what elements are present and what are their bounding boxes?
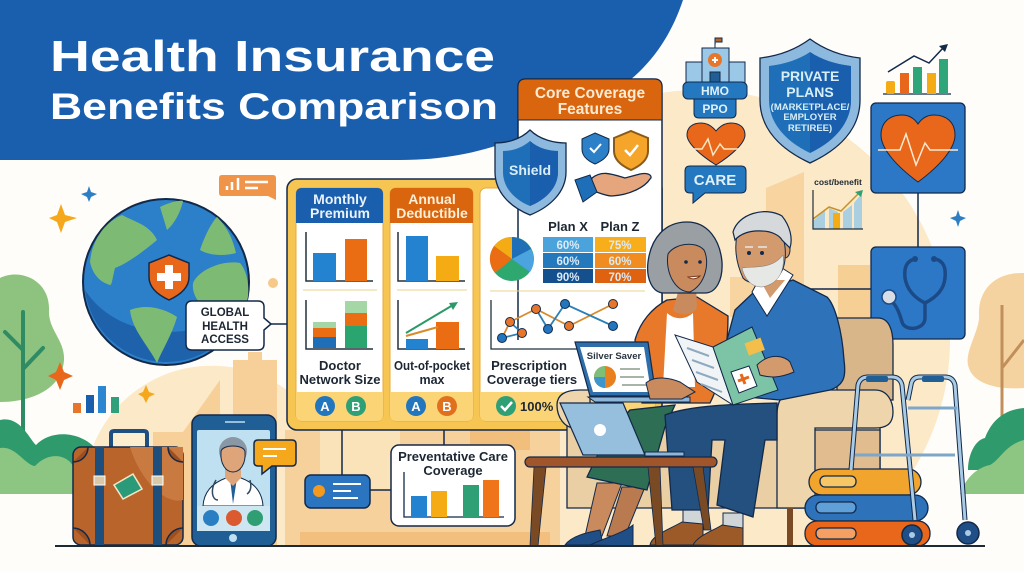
man trousers <box>665 403 777 517</box>
panel: preventative care coverage: Preventative Care <box>398 449 508 464</box>
column: prescription coverage: 100% <box>520 399 554 414</box>
shield: private plans: (MARKETPLACE/ <box>771 102 850 113</box>
callout: global health access: ACCESS <box>201 334 249 346</box>
coverage table: plan x and plan z: 60% <box>556 256 580 268</box>
column: monthly premium: A <box>320 399 330 414</box>
woman hand <box>646 378 695 399</box>
man ear <box>780 242 790 258</box>
laptop: silver front <box>560 403 684 456</box>
background: peach city blob <box>84 90 950 547</box>
man head <box>736 230 785 283</box>
armchair sofa <box>557 318 893 546</box>
column: annual deductible: Out-of-pocket <box>394 359 471 373</box>
panel: core coverage features: Features <box>558 101 622 118</box>
title: Benefits Comparison <box>50 86 498 127</box>
coverage table: plan x and plan z: 75% <box>608 240 632 252</box>
woman hair <box>648 222 722 293</box>
woman neck <box>673 285 697 314</box>
column: prescription coverage <box>480 188 655 421</box>
label: hmo ppo <box>683 82 747 118</box>
suitcase <box>73 431 183 545</box>
label: prescription coverage tiers: Prescription <box>491 358 567 373</box>
coverage table: plan x and plan z: 60% <box>556 240 580 252</box>
man collar <box>752 268 793 316</box>
icon: shield: Shield <box>509 162 551 178</box>
callout: global health access <box>186 301 287 350</box>
coffee table <box>525 457 717 546</box>
sparkle stars <box>48 186 966 403</box>
coverage table: plan x and plan z: Plan X <box>548 219 588 234</box>
column: annual deductible: Annual <box>408 191 456 207</box>
ground line <box>55 545 985 547</box>
panel: stethoscope icon box <box>871 247 965 339</box>
blue info card <box>305 475 370 508</box>
booklet <box>675 327 778 405</box>
left bushes <box>0 419 97 494</box>
panel: preventative care coverage <box>391 445 515 526</box>
coverage table: plan x and plan z: 90% <box>556 272 580 284</box>
icon: orange chart speech bubble <box>219 175 276 200</box>
column: monthly premium <box>296 188 383 421</box>
speech bubble: care: CARE <box>694 172 736 189</box>
panel: comparison board <box>287 179 662 430</box>
icon: yellow chat bubble <box>254 440 296 474</box>
mini pie chart <box>490 237 534 281</box>
panel: core coverage features: Core Coverage <box>535 85 646 102</box>
man hand <box>757 356 794 377</box>
woman blouse <box>663 313 695 387</box>
man beard <box>742 255 783 287</box>
connector lines <box>342 193 918 490</box>
title banner <box>0 0 683 160</box>
label: hmo ppo: PPO <box>702 102 728 116</box>
globe <box>83 199 249 365</box>
icon: small orange shield <box>614 131 648 170</box>
woman face <box>667 244 707 292</box>
panel: preventative care coverage: Coverage <box>423 463 483 478</box>
label: prescription coverage tiers: Coverage tiers <box>487 372 577 387</box>
icon: hospital <box>686 38 745 84</box>
laptop: silver saver <box>575 342 690 402</box>
shield: private plans: EMPLOYER <box>783 112 837 123</box>
shield: private plans: RETIREE) <box>788 123 832 134</box>
woman <box>565 222 728 546</box>
coverage table: plan x and plan z: 60% <box>608 256 632 268</box>
coverage table: plan x and plan z: Plan Z <box>600 219 640 234</box>
column: monthly premium: Monthly <box>313 191 367 207</box>
shield: private plans: PLANS <box>786 84 834 100</box>
right tree <box>968 273 1024 420</box>
chart: cost/benefit <box>813 177 863 229</box>
icon: shield <box>495 130 566 215</box>
title <box>50 32 498 127</box>
man <box>650 212 845 546</box>
column: annual deductible: A <box>411 399 421 414</box>
chart: top right growth bars <box>883 44 951 94</box>
man socks and shoes <box>650 510 743 546</box>
man sweater <box>725 280 845 400</box>
icon: small heart <box>680 123 750 165</box>
woman trousers <box>587 405 675 490</box>
column: annual deductible: B <box>442 399 452 414</box>
left tree <box>0 275 64 435</box>
column: annual deductible: max <box>419 373 445 387</box>
callout: global health access: GLOBAL <box>201 307 249 319</box>
column: monthly premium: Premium <box>310 205 370 221</box>
speech bubble: care <box>685 166 746 203</box>
icon: small blue shield <box>582 133 609 164</box>
panel: core coverage features <box>518 79 662 340</box>
folded blankets <box>805 469 930 546</box>
coverage table: plan x and plan z: 70% <box>608 272 632 284</box>
mini bars left <box>73 386 119 413</box>
coverage table: plan x and plan z <box>490 219 646 291</box>
column: annual deductible <box>390 188 473 421</box>
line chart <box>491 300 618 349</box>
column: monthly premium: Doctor <box>319 358 361 373</box>
woman cardigan <box>635 297 728 403</box>
globe shield icon <box>149 255 189 300</box>
phone telehealth <box>192 415 276 546</box>
column: annual deductible: Deductible <box>396 205 468 221</box>
woman legs and shoes <box>565 483 645 546</box>
column: monthly premium: Network Size <box>300 372 380 387</box>
man neck <box>760 280 785 298</box>
walker <box>851 376 979 545</box>
shield: private plans <box>760 39 860 163</box>
column: monthly premium: B <box>351 399 361 414</box>
shield: private plans: PRIVATE <box>781 68 839 84</box>
laptop: silver saver: Silver Saver <box>587 351 642 362</box>
right bushes <box>960 408 1024 494</box>
icon: open hand <box>575 173 651 202</box>
callout: global health access: HEALTH <box>202 321 248 333</box>
label: hmo ppo: HMO <box>701 84 729 98</box>
panel: heart icon box <box>871 103 965 193</box>
title: Health Insurance <box>50 32 495 81</box>
man hair <box>733 212 791 248</box>
chart: cost/benefit: cost/benefit <box>814 177 862 187</box>
